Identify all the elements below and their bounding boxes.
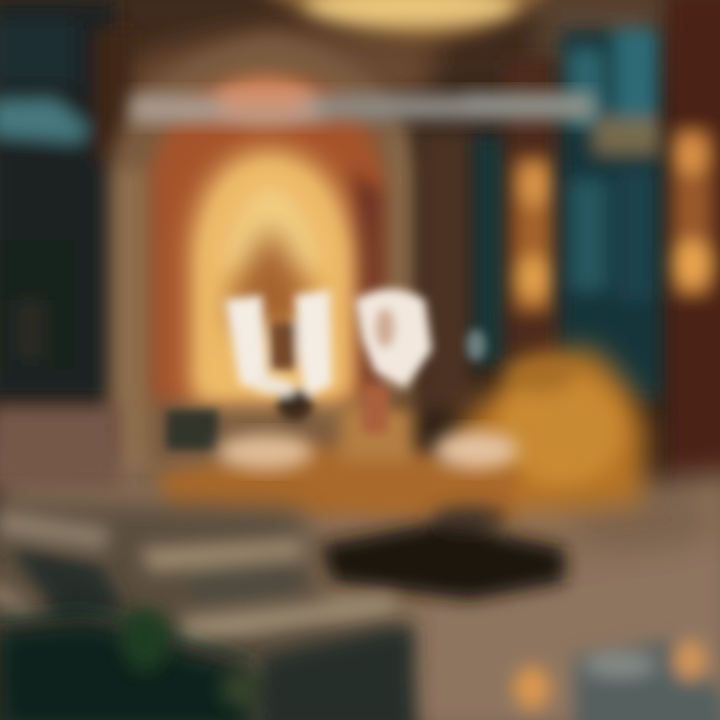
dark chair xyxy=(166,410,218,450)
foreground lights bottom right xyxy=(514,640,720,720)
orange table xyxy=(155,405,520,520)
ceiling light xyxy=(250,0,560,42)
plant foreground xyxy=(0,615,265,720)
right teal windows xyxy=(560,28,665,400)
plant leaves xyxy=(121,608,418,720)
inner brown alcove xyxy=(232,225,310,330)
inner yellow glow xyxy=(200,165,345,395)
stairs xyxy=(0,500,410,680)
white figure left xyxy=(225,290,332,421)
floor xyxy=(0,440,720,720)
center teal window xyxy=(474,135,508,365)
orange arch xyxy=(152,74,385,400)
orange sofa right xyxy=(450,348,648,515)
yellow inner arch xyxy=(192,150,352,400)
left window area xyxy=(0,0,130,400)
lower left stone xyxy=(0,405,120,490)
white tablecloth right xyxy=(434,431,518,469)
left stone column and outer arch xyxy=(108,35,420,480)
stair highlights xyxy=(0,510,400,645)
white banner band xyxy=(130,92,595,124)
sofa highlight xyxy=(498,357,622,485)
black coffee table xyxy=(318,506,565,600)
right brown wall panel xyxy=(418,130,473,410)
lamp column xyxy=(505,60,565,360)
ceiling xyxy=(0,0,720,120)
right dark red column with lamps xyxy=(668,0,720,480)
white tablecloth left xyxy=(217,434,313,470)
small figure accent xyxy=(466,329,486,361)
white figure right xyxy=(355,289,432,433)
